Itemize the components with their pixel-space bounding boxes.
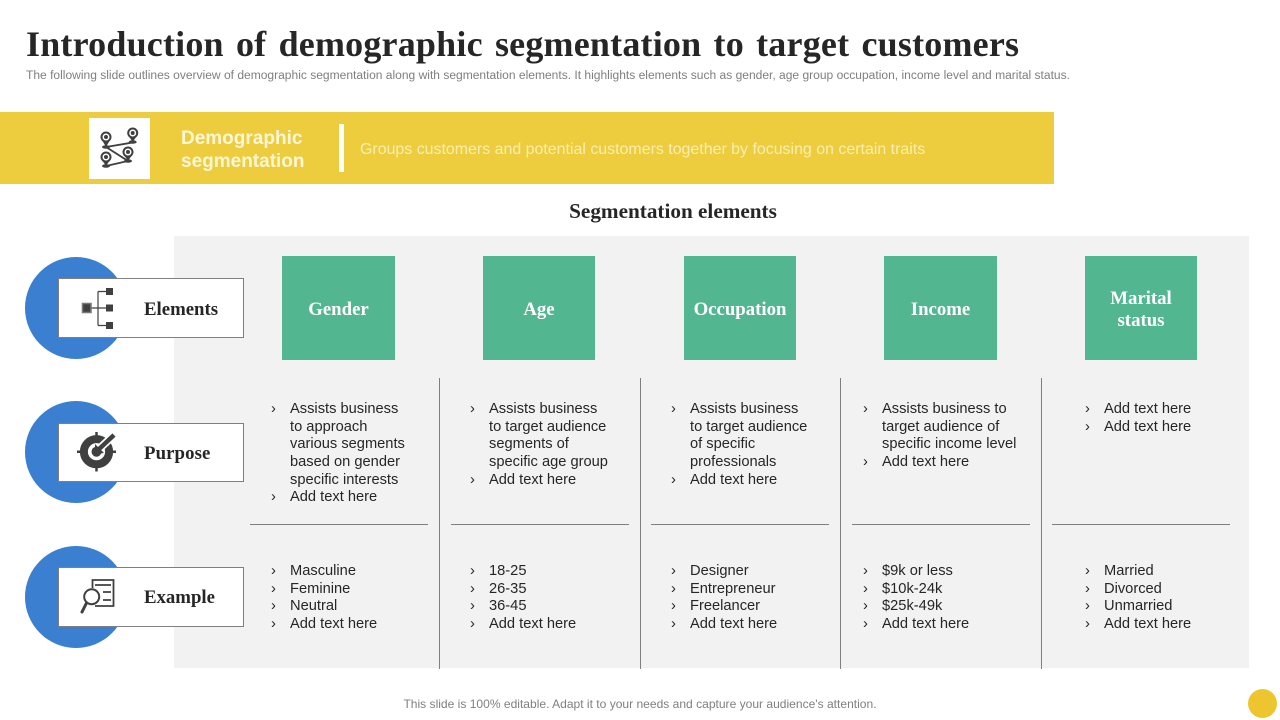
card: occupation: Occupation bbox=[694, 299, 786, 320]
example: marital status: Unmarried bbox=[1104, 598, 1172, 614]
example: gender bbox=[272, 563, 377, 632]
label text: Purpose bbox=[144, 443, 210, 464]
circle bbox=[25, 257, 127, 359]
purpose: gender: specific interests bbox=[290, 472, 398, 488]
example: marital status: Add text here bbox=[1104, 616, 1191, 632]
example: age: Add text here bbox=[489, 616, 576, 632]
purpose: occupation: of specific bbox=[690, 436, 755, 452]
example: gender: Masculine bbox=[290, 563, 356, 579]
grey panel bbox=[174, 236, 1249, 668]
icon: demographic map pins bbox=[89, 118, 150, 179]
subtitle: The following slide outlines overview of demographic segmentation along with segmentation elements. It highlights elements such as gender, age group occupation, income level and marital status. bbox=[26, 68, 1070, 82]
card: gender bbox=[282, 256, 395, 360]
card: income bbox=[884, 256, 997, 360]
purpose: income: Assists business to bbox=[882, 401, 1007, 417]
example: gender: Add text here bbox=[290, 616, 377, 632]
example: income: $10k-24k bbox=[882, 581, 942, 597]
footer note: This slide is 100% editable. Adapt it to your needs and capture your audience's attention. bbox=[403, 697, 877, 711]
label box bbox=[58, 423, 244, 482]
label text: Elements bbox=[144, 299, 218, 320]
circle bbox=[25, 401, 127, 503]
banner heading bbox=[181, 128, 305, 172]
card: age bbox=[483, 256, 595, 360]
banner description: Groups customers and potential customers together by focusing on certain traits bbox=[360, 141, 925, 158]
yellow corner dot bbox=[1248, 689, 1277, 718]
circle bbox=[25, 546, 127, 648]
example: age: 26-35 bbox=[489, 581, 526, 597]
example: occupation bbox=[672, 563, 777, 632]
example: income: $9k or less bbox=[882, 563, 953, 579]
purpose: gender: Assists business bbox=[290, 401, 398, 417]
banner heading: Demographic bbox=[181, 128, 302, 149]
purpose: marital status bbox=[1086, 401, 1191, 435]
purpose: age: segments of bbox=[489, 436, 569, 452]
purpose: age: Assists business bbox=[489, 401, 597, 417]
purpose: marital status: Add text here bbox=[1104, 401, 1191, 417]
purpose: gender: based on gender bbox=[290, 454, 400, 470]
icon: hierarchy bbox=[82, 288, 113, 329]
example: age: 36-45 bbox=[489, 598, 526, 614]
row: purpose bbox=[25, 401, 244, 503]
purpose: occupation: to target audience bbox=[690, 419, 807, 435]
card: occupation bbox=[684, 256, 796, 360]
purpose: gender: various segments bbox=[290, 436, 405, 452]
example: occupation: Freelancer bbox=[690, 598, 760, 614]
example: marital status bbox=[1086, 563, 1191, 632]
section heading: Segmentation elements bbox=[569, 199, 777, 223]
banner divider bbox=[339, 124, 344, 172]
purpose: income: target audience of bbox=[882, 419, 999, 435]
example: income: Add text here bbox=[882, 616, 969, 632]
example: occupation: Entrepreneur bbox=[690, 581, 776, 597]
banner bbox=[0, 112, 1054, 184]
purpose: occupation: Add text here bbox=[690, 472, 777, 488]
example: age: 18-25 bbox=[489, 563, 526, 579]
example: gender: Feminine bbox=[290, 581, 350, 597]
purpose: age: Add text here bbox=[489, 472, 576, 488]
purpose: occupation: Assists business bbox=[690, 401, 798, 417]
purpose: age: specific age group bbox=[489, 454, 608, 470]
label text: Example bbox=[144, 587, 215, 608]
label box bbox=[58, 278, 244, 338]
example: income: $25k-49k bbox=[882, 598, 942, 614]
row: example bbox=[25, 546, 244, 648]
card: age: Age bbox=[523, 299, 555, 320]
purpose: occupation bbox=[672, 401, 807, 488]
example: gender: Neutral bbox=[290, 598, 337, 614]
purpose: gender bbox=[272, 401, 405, 505]
purpose: gender: to approach bbox=[290, 419, 367, 435]
purpose: income: Add text here bbox=[882, 454, 969, 470]
card: gender: Gender bbox=[308, 299, 369, 320]
purpose: age: to target audience bbox=[489, 419, 606, 435]
example: occupation: Designer bbox=[690, 563, 749, 579]
purpose: income: specific income level bbox=[882, 436, 1016, 452]
icon: document magnifier bbox=[80, 579, 114, 614]
example: income bbox=[864, 563, 969, 632]
card: marital status: status bbox=[1118, 310, 1164, 331]
purpose: income bbox=[864, 401, 1016, 470]
example: occupation: Add text here bbox=[690, 616, 777, 632]
purpose: age bbox=[470, 401, 608, 488]
card: marital status bbox=[1085, 256, 1197, 360]
purpose: occupation: professionals bbox=[690, 454, 776, 470]
example: marital status: Divorced bbox=[1104, 581, 1162, 597]
banner heading: segmentation bbox=[181, 151, 305, 172]
card: income: Income bbox=[911, 299, 970, 320]
purpose: marital status: Add text here bbox=[1104, 419, 1191, 435]
example: marital status: Married bbox=[1104, 563, 1154, 579]
row: elements bbox=[25, 257, 244, 359]
example: age bbox=[470, 563, 576, 632]
title: Introduction of demographic segmentation to target customers bbox=[26, 24, 1019, 64]
card: marital status: Marital bbox=[1110, 288, 1172, 309]
purpose: gender: Add text here bbox=[290, 489, 377, 505]
label box bbox=[58, 567, 244, 627]
icon: target bbox=[77, 432, 116, 472]
